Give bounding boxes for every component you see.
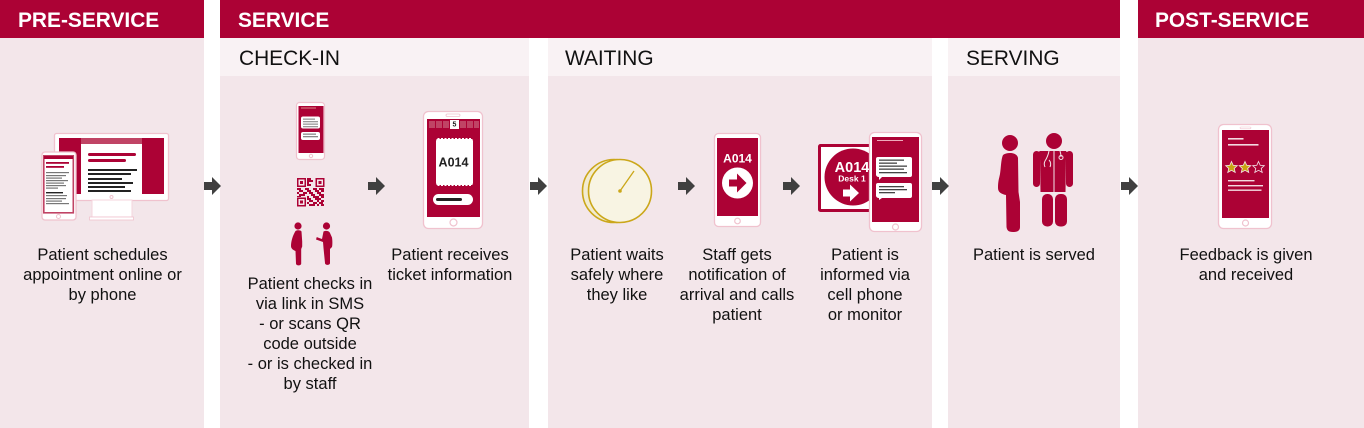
arrow [368,177,385,195]
text: patient schedules: by phone [69,286,136,304]
icon: phone with ticket: A014 [439,156,468,170]
arrow [932,177,949,195]
text: patient is informed: Patient is [831,246,899,264]
text: staff gets notification: patient [712,306,762,324]
panel: waiting: WAITING [565,47,654,70]
panel: check-in: CHECK-IN [239,47,340,70]
text: patient is served: Patient is served [973,246,1095,264]
text: patient checks in: - or scans QR [259,315,361,333]
icon: phone with notification [714,134,760,226]
text: feedback: Feedback is given [1180,246,1312,264]
arrow [530,177,547,195]
icon: patient and doctor [998,133,1073,232]
icon: two people check-in [291,222,332,265]
text: staff gets notification: arrival and calls [680,286,794,304]
text: patient schedules: appointment online or [23,266,182,284]
arrow [678,177,695,195]
text: patient waits: Patient waits [570,246,664,264]
icon: phone with notification: A014 [723,152,752,166]
text: patient receives: Patient receives [391,246,509,264]
text: patient is informed: or monitor [828,306,903,324]
arrow [783,177,800,195]
text: patient schedules: Patient schedules [37,246,168,264]
text: patient checks in: Patient checks in [248,275,372,293]
arrow [1121,177,1138,195]
icon: QR code [297,178,324,206]
panel: service header [220,0,1120,38]
panel: serving [948,38,1120,428]
icon: clock [582,160,652,222]
icon: phone with ticket: 5 [453,122,457,128]
arrow [204,177,221,195]
text: patient checks in: code outside [263,335,357,353]
panel: check-in [220,38,529,428]
text: feedback: and received [1199,266,1293,284]
icon: phone with ticket [424,112,482,228]
text: patient is informed: informed via [820,266,911,284]
panel: post-service [1138,0,1364,428]
text: staff gets notification: notification of [688,266,786,284]
text: patient checks in: via link in SMS [256,295,364,313]
panel: post-service: POST-SERVICE [1155,9,1309,32]
text: patient is informed: cell phone [827,286,903,304]
text: patient waits: safely where [571,266,663,284]
text: patient checks in: - or is checked in [248,355,372,373]
icon: monitor and phone: A014 [835,160,869,176]
text: patient checks in: by staff [284,375,337,393]
icon: phone with SMS [296,102,324,160]
panel: serving: SERVING [966,47,1060,70]
icon: monitor and phone [820,132,922,232]
icon: monitor and phone: Desk 1 [838,174,866,184]
panel: pre-service [0,0,204,428]
icon: phone with rating stars [1218,124,1272,228]
text: staff gets notification: Staff gets [702,246,772,264]
panel: service header: SERVICE [238,9,329,32]
text: patient receives: ticket information [388,266,512,284]
panel: pre-service: PRE-SERVICE [18,9,159,32]
text: patient waits: they like [587,286,647,304]
icon: desktop and phone with schedule [42,134,168,220]
panel: waiting [548,38,932,428]
